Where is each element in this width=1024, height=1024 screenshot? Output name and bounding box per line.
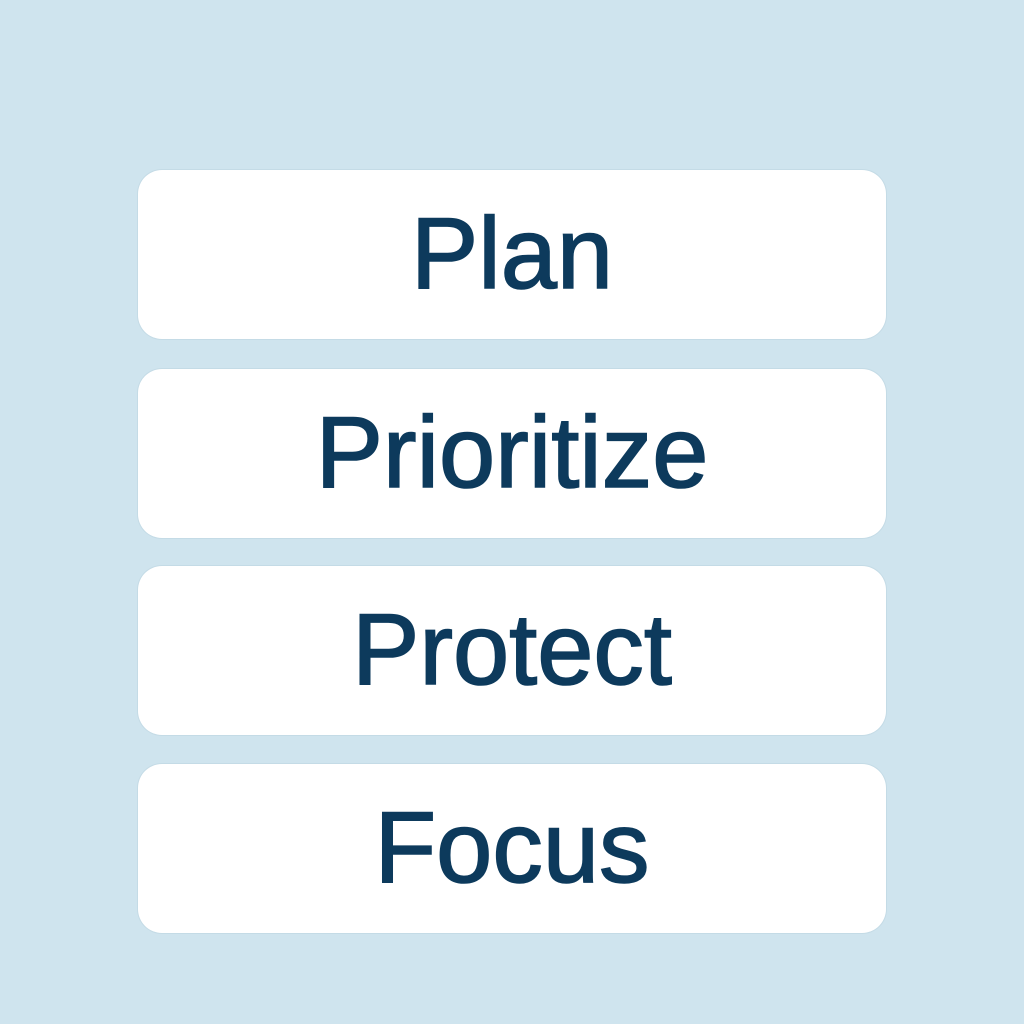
card: Plan: Plan xyxy=(411,198,613,310)
card: Protect: Protect xyxy=(352,594,672,706)
card: Prioritize: Prioritize xyxy=(316,397,708,509)
card: Plan xyxy=(138,170,886,339)
card: Protect xyxy=(138,566,886,735)
card: Focus: Focus xyxy=(374,792,650,904)
card: Prioritize xyxy=(138,369,886,538)
card: Focus xyxy=(138,764,886,933)
